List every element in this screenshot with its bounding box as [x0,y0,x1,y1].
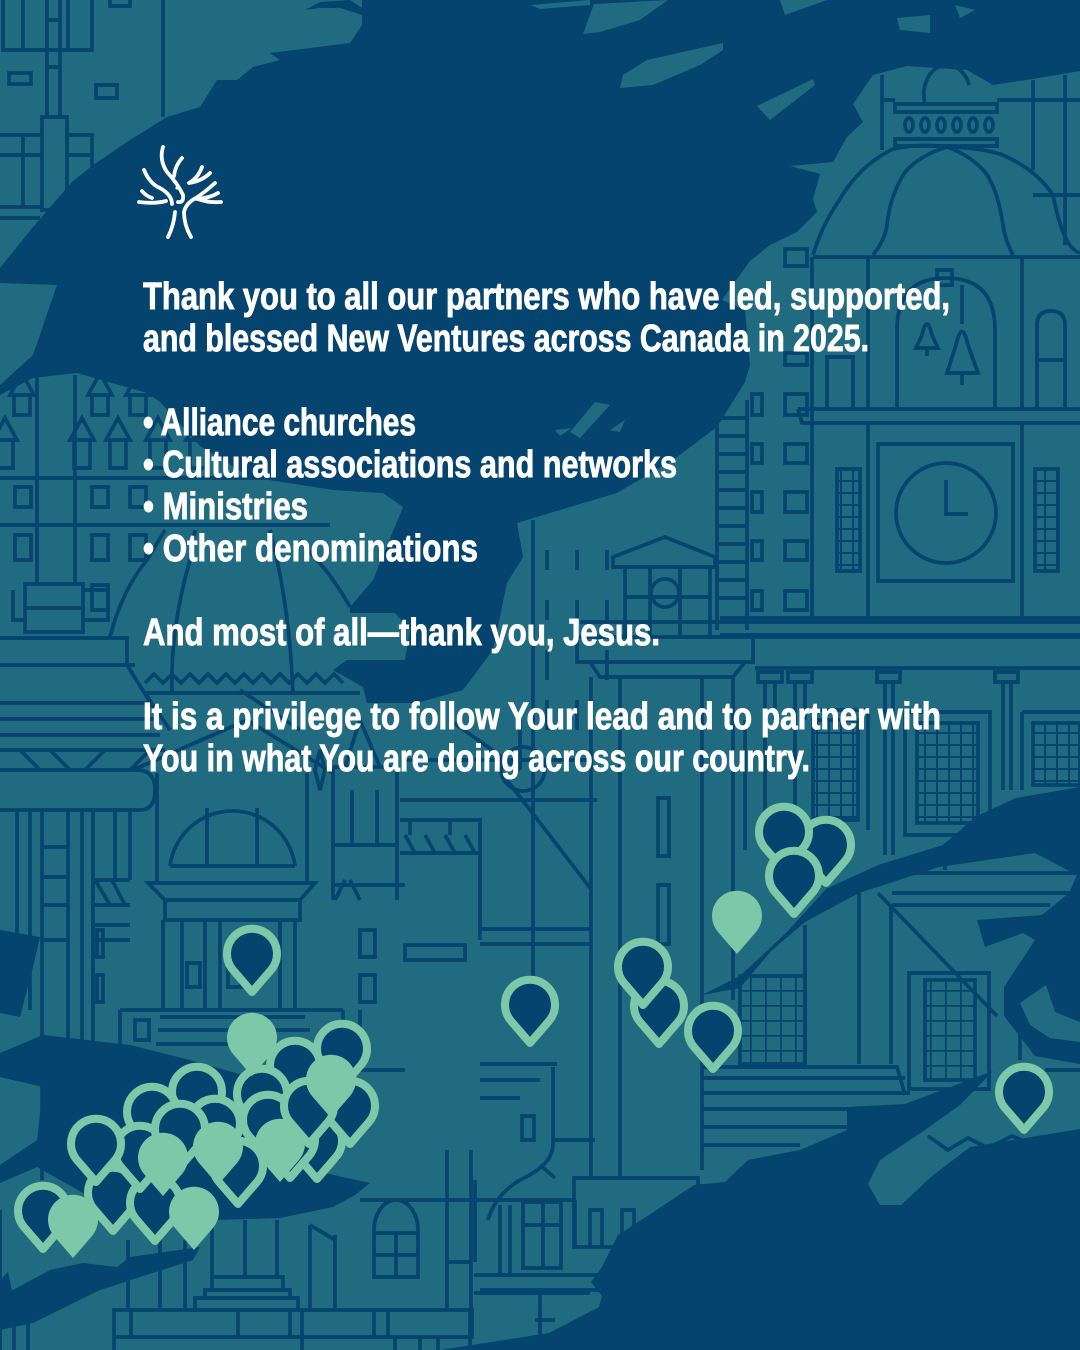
pin [317,1024,367,1087]
map pins: western cluster [18,929,375,1258]
navy brush: lower left corner [0,1272,12,1300]
line art: right upper building [798,145,1080,618]
icon: tree logo [139,147,221,237]
pin [712,891,762,954]
message: partner list: • Ministries [143,486,308,528]
pin [227,929,277,992]
pin [213,1141,263,1204]
pin [243,1095,293,1158]
line art: top-left tower [0,0,163,218]
navy brush: top sweep [0,0,1080,703]
pin [270,1041,320,1104]
message: closing [143,696,941,780]
message: partner list: • Other denominations [143,528,478,570]
pin [306,1055,356,1118]
pin [634,981,684,1044]
pin [801,820,851,883]
pin [769,851,819,914]
line art: bottom left plinth [0,1150,600,1350]
pin [138,1133,188,1196]
pin [172,1067,222,1130]
pin [190,1099,240,1162]
pin [130,1178,180,1241]
line art: central tower and pavilion [480,520,753,1350]
pin [88,1168,138,1231]
teal gap in right band [1020,985,1080,1042]
line art: centre-left building [315,720,597,1220]
pin [227,1013,277,1076]
message: partner list: • Alliance churches [143,402,416,444]
navy brush: upper right band [702,787,1080,1064]
navy brush: left upper flick [0,930,40,1017]
pin [193,1122,243,1185]
pin [48,1195,98,1258]
pin [155,1104,205,1167]
pin [999,1067,1049,1130]
line art: central dome [110,530,360,693]
navy brush: top branch [305,0,362,15]
message: closing: You in what You are doing across our country. [143,738,810,780]
message: closing: It is a privilege to follow Your lead and to partner with [143,696,941,738]
pin [127,1087,177,1150]
pin [284,1081,334,1144]
message: partner list [143,402,677,570]
teal gaps in top sweep [0,0,975,438]
pin [265,1115,315,1178]
line art: lower right blocks [740,976,805,1064]
pin [18,1186,68,1249]
pin [325,1081,375,1144]
pin [71,1119,121,1182]
pin [255,1119,305,1182]
pin [618,942,668,1005]
message: opening thanks [143,276,950,360]
map pins: eastern cluster [505,807,1049,1130]
navy brush: left lower flick [0,1247,200,1330]
message: opening thanks: and blessed New Ventures across Canada in 2025. [143,318,869,360]
message: thanks to Jesus: And most of all—thank you, Jesus. [143,612,660,654]
pin [292,1116,342,1179]
pin [505,980,555,1043]
pin [169,1187,219,1250]
pin [237,1069,287,1132]
message: partner list: • Cultural associations and networks [143,444,677,486]
pin [115,1126,165,1189]
navy brush: left central mass [0,1035,370,1220]
pin [759,807,809,870]
line art: right colonnade [580,622,1080,855]
navy brush: bottom right mass [440,1071,1080,1350]
line art: left chateau [0,375,165,1210]
pin [688,1006,738,1069]
